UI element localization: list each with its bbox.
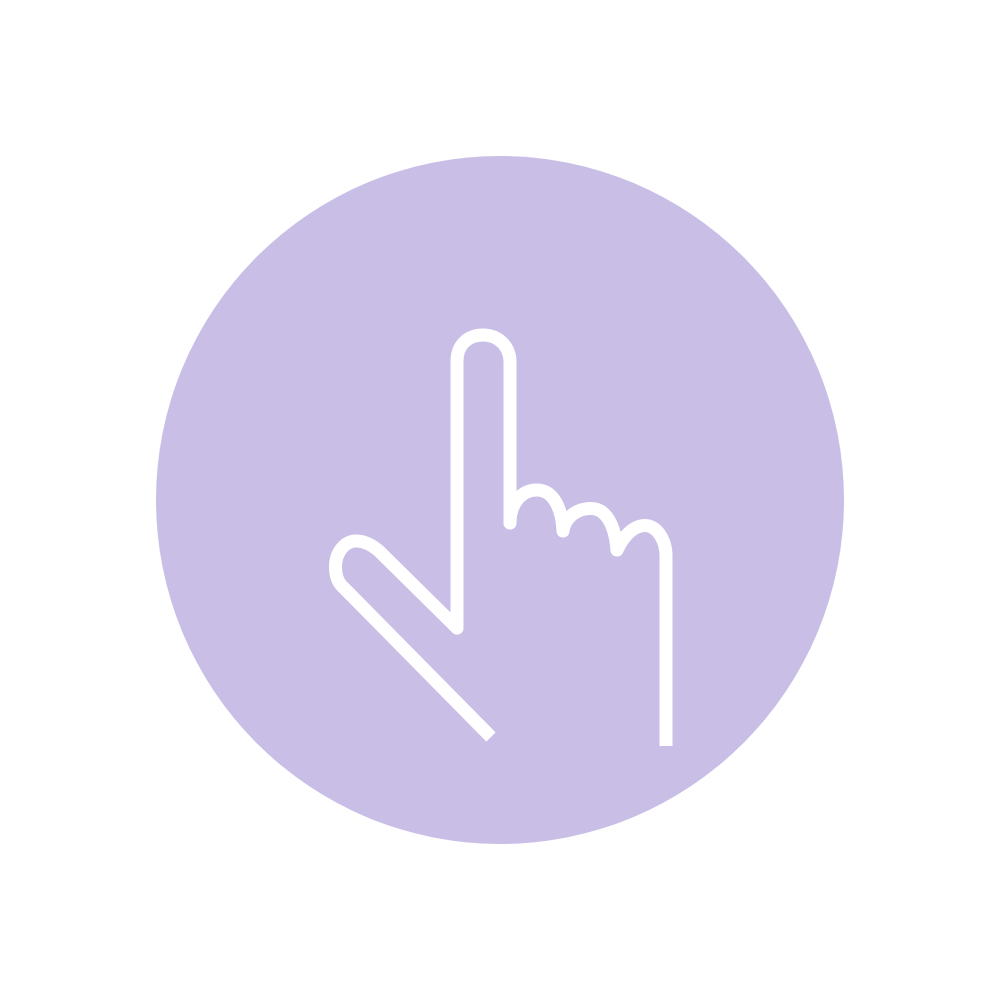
circle background	[156, 156, 844, 844]
hand outline	[336, 335, 666, 746]
finger joint round caps	[450, 516, 624, 634]
